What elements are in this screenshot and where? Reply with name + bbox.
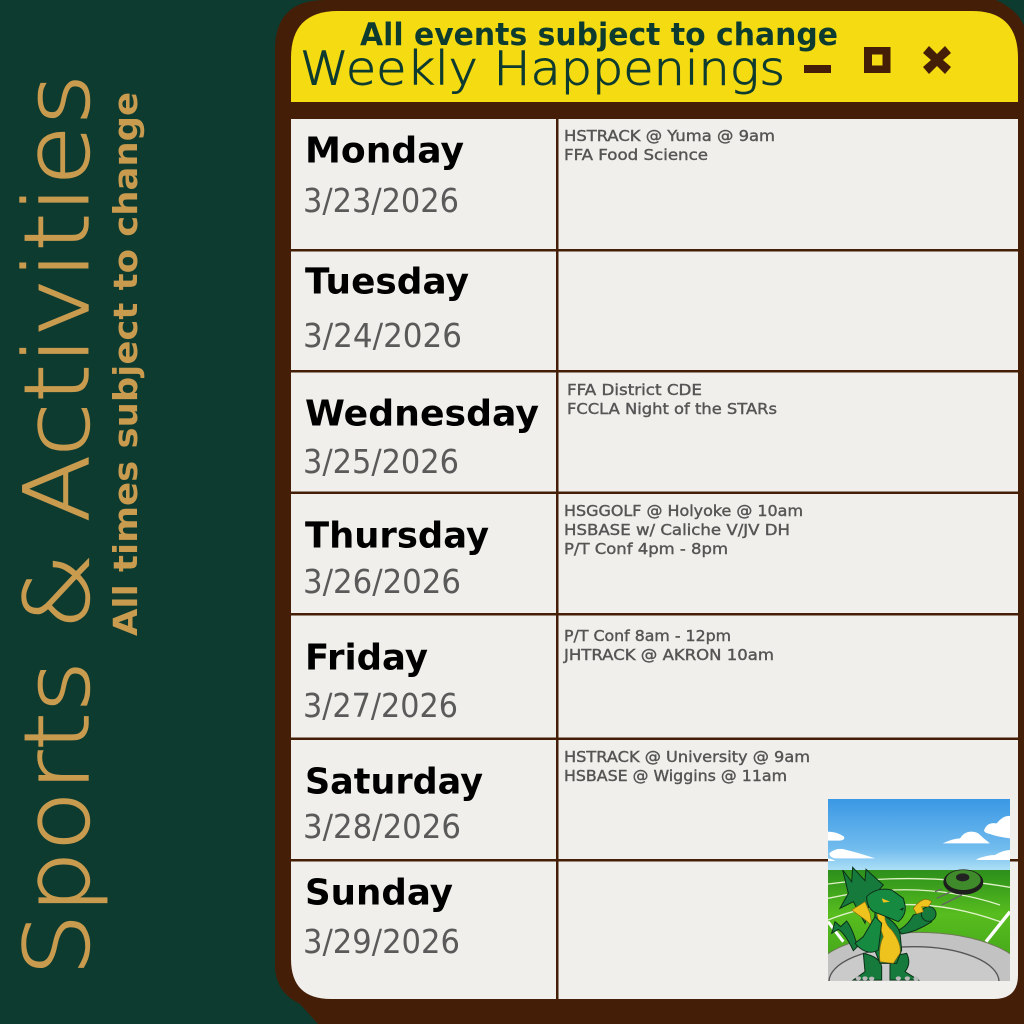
row: Thursday — [303, 502, 803, 601]
row: Thursday: P/T Conf 4pm - 8pm — [564, 540, 728, 558]
row: Thursday: HSGGOLF @ Holyoke @ 10am — [564, 502, 803, 520]
row: Friday: 3/27/2026 — [303, 687, 458, 725]
dragon right arm and fist — [898, 912, 932, 934]
row: Monday — [303, 127, 775, 220]
row: Saturday — [303, 748, 810, 846]
row: Monday: Monday — [305, 130, 464, 172]
panel background — [291, 119, 1018, 999]
dragon head — [867, 889, 905, 922]
row: Wednesday: FCCLA Night of the STARs — [567, 400, 777, 418]
row: Friday — [303, 627, 774, 725]
row: Friday: JHTRACK @ AKRON 10am — [563, 646, 774, 664]
notice heading: All events subject to change — [360, 17, 838, 53]
row dividers — [291, 249, 1018, 862]
dragon wings — [840, 867, 883, 923]
row: Thursday: 3/26/2026 — [303, 563, 461, 601]
row: Saturday: HSTRACK @ University @ 9am — [564, 748, 810, 766]
row: Wednesday: FFA District CDE — [567, 381, 702, 399]
column divider — [556, 119, 558, 999]
icon: close — [923, 46, 951, 74]
window title bar — [291, 11, 1018, 102]
row: Wednesday: 3/25/2026 — [303, 443, 459, 481]
row: Friday: Friday — [305, 638, 428, 678]
window title: Weekly Happenings — [300, 42, 785, 96]
row: Thursday: Thursday — [305, 516, 489, 556]
dragon body — [873, 912, 902, 963]
row: Monday: 3/23/2026 — [303, 182, 459, 220]
discus — [943, 869, 983, 895]
row: Thursday: HSBASE w/ Caliche V/JV DH — [564, 521, 790, 539]
row: Wednesday — [303, 381, 777, 481]
row: Sunday: 3/29/2026 — [303, 923, 460, 961]
row: Monday: HSTRACK @ Yuma @ 9am — [564, 127, 775, 145]
row: Sunday — [303, 872, 460, 961]
dragon tail — [832, 921, 857, 951]
mascot illustration: dragon throwing discus — [828, 799, 1010, 981]
row: Saturday: HSBASE @ Wiggins @ 11am — [564, 767, 787, 785]
window frame — [275, 0, 1024, 1024]
schedule panel — [291, 119, 1018, 999]
title bar background — [291, 11, 1018, 102]
vertical subtitle: all times subject to change: All times subject to change — [106, 92, 145, 636]
row: Friday: P/T Conf 8am - 12pm — [564, 627, 731, 645]
row: Tuesday — [303, 262, 469, 355]
row: Saturday: 3/28/2026 — [303, 808, 461, 846]
icon: maximize — [864, 47, 890, 73]
row: Saturday: Saturday — [305, 762, 483, 802]
corner of background top right — [996, 0, 1024, 26]
row: Tuesday: 3/24/2026 — [303, 317, 462, 355]
row: Tuesday: Tuesday — [305, 262, 469, 302]
row: Sunday: Sunday — [305, 872, 453, 914]
icon: minimize — [804, 65, 831, 73]
row: Wednesday: Wednesday — [305, 394, 539, 434]
dragon legs — [853, 953, 882, 980]
row: Monday: FFA Food Science — [564, 146, 708, 164]
dragon left arm — [855, 917, 882, 952]
dragon belly — [877, 912, 900, 963]
vertical title: Sports & Activities: Sports & Activities — [5, 74, 109, 976]
